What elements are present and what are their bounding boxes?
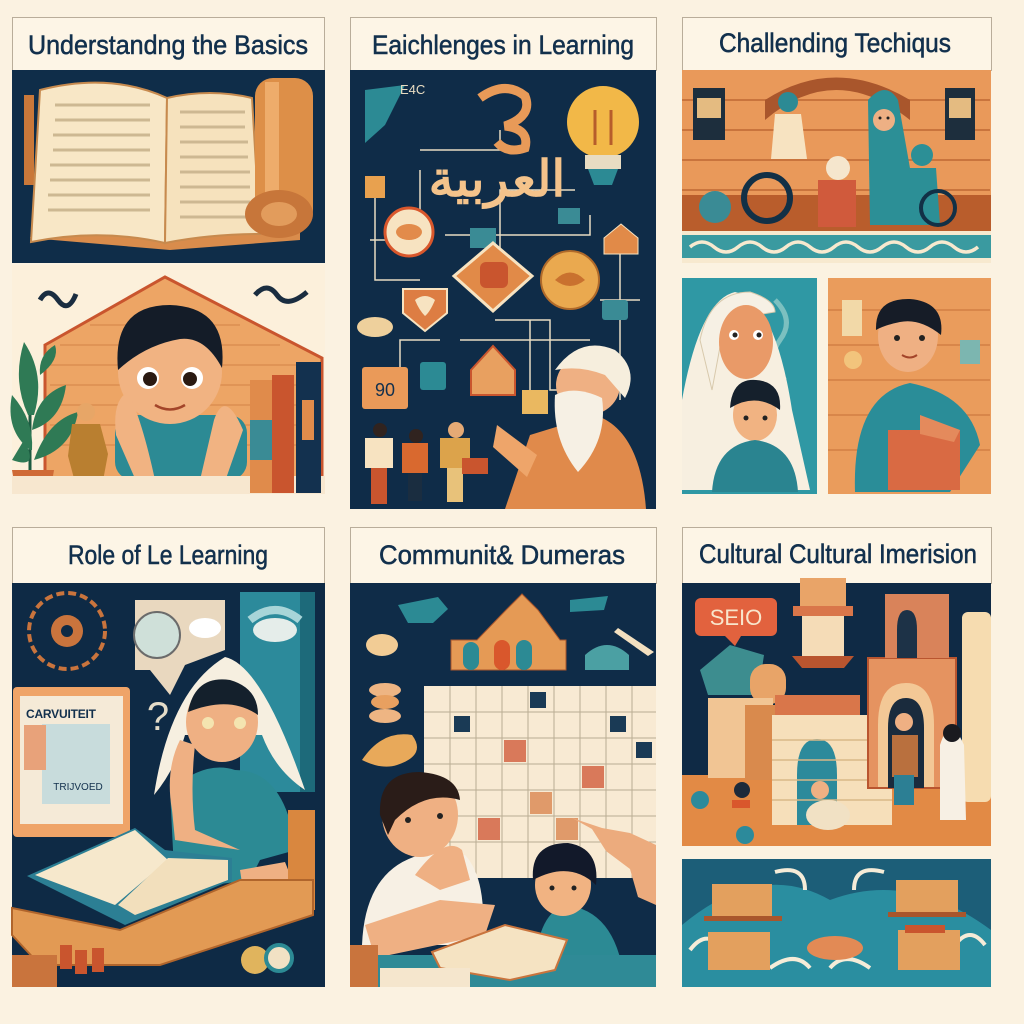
speech bubble: SEIO <box>710 605 762 630</box>
heading: cultural immersion <box>682 528 992 584</box>
panel: role of learning <box>12 528 325 987</box>
building <box>451 594 566 670</box>
speech bubble <box>695 598 777 646</box>
student <box>154 657 305 890</box>
heading: cultural immersion: Cultural Cultural Imerision <box>699 539 977 569</box>
icon: light bulb <box>567 86 639 185</box>
panel: cultural immersion <box>682 528 992 987</box>
heading: challenges in learning: Eaichlenges in Learning <box>372 30 634 60</box>
tower <box>792 578 854 668</box>
monitor: TRIJVOED <box>53 782 103 793</box>
panel: understanding the basics <box>10 18 325 494</box>
illustration: boy at brick wall <box>10 265 325 494</box>
open book on table <box>350 925 656 987</box>
illustration: concept map with teacher: العربية <box>429 151 565 209</box>
heading: challenging techniques: Challending Techiqus <box>719 28 951 58</box>
heading: challenges in learning <box>350 18 656 70</box>
monitor: CARVUITEIT <box>26 707 97 721</box>
heading: understanding the basics: Understandng the Basics <box>28 30 308 60</box>
crossword grid <box>424 686 656 878</box>
monitor <box>13 687 130 837</box>
heading: community <box>350 528 656 584</box>
teacher figure <box>493 346 646 509</box>
panel: community and dumeras <box>350 528 656 987</box>
illustration: student reading at desk <box>12 583 325 987</box>
illustration: elder with boy <box>682 278 817 494</box>
older boy <box>362 772 495 958</box>
group of people <box>365 422 488 504</box>
illustration: floating desks on water <box>682 859 991 987</box>
illustration: open book and scroll <box>12 70 325 263</box>
illustration: cultural town <box>682 578 991 846</box>
illustration: crossword with two boys <box>350 583 656 987</box>
heading: community: Communit& Dumeras <box>379 540 625 570</box>
hand with pen <box>572 818 656 905</box>
illustration: boy with book <box>828 278 991 494</box>
illustration: concept map with teacher: E4C <box>400 82 425 97</box>
heading: understanding the basics <box>12 18 324 70</box>
illustration: student reading at desk: ? <box>147 695 169 739</box>
panel: challenging techniques <box>682 18 992 494</box>
younger boy <box>533 843 624 978</box>
illustration: figures in brick hall <box>682 70 991 231</box>
decorative wave band <box>682 231 991 263</box>
heading: role of learning <box>12 528 324 584</box>
open book on desk <box>27 828 232 925</box>
heading: role of learning: Role of Le Learning <box>68 540 268 570</box>
panel: challenges in learning <box>350 18 656 509</box>
connector lines <box>370 130 640 400</box>
heading: challenging techniques <box>682 18 992 70</box>
illustration: concept map with teacher: 90 <box>375 380 395 400</box>
illustration: concept map with teacher <box>350 70 656 509</box>
desk <box>12 880 313 965</box>
